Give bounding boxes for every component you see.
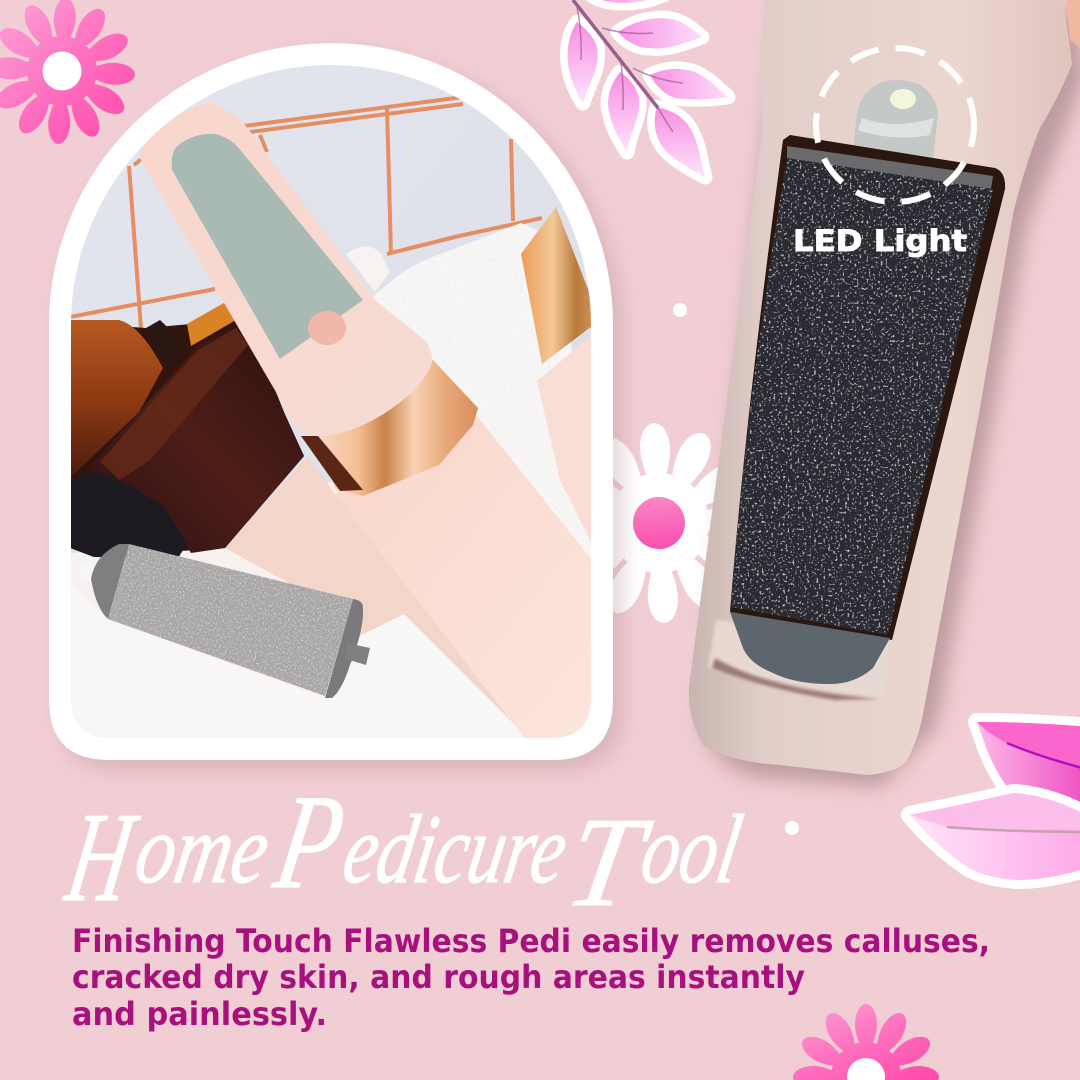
roller end cap (730, 612, 890, 684)
translucent window base (708, 620, 892, 700)
panel: arched product photo (49, 43, 613, 760)
title: edicure (336, 796, 575, 904)
white knob (346, 246, 390, 292)
dark underlay of bottles (60, 320, 304, 557)
device window frame (730, 135, 1005, 640)
upper white towel (374, 223, 591, 558)
gold collar (318, 359, 478, 496)
icon: pink daisy top-left (0, 0, 140, 148)
peach towel (225, 456, 525, 738)
description text: and painlessly. (72, 995, 327, 1033)
icon: lotus right (910, 722, 1080, 880)
description text: cracked dry skin, and rough areas instantly (72, 958, 805, 996)
dark abrasive roller (731, 158, 993, 635)
dashed circle (816, 48, 974, 202)
title: H (57, 786, 147, 928)
panel: handheld device close-up (689, 0, 1080, 775)
label: LED Light: LED Light (793, 224, 967, 258)
amber bottle behind (187, 300, 236, 346)
LED bulb (853, 80, 938, 160)
spare roller (77, 544, 370, 698)
base towel (71, 482, 340, 698)
icon: pink daisy bottom (793, 1004, 939, 1080)
title: ome (128, 796, 277, 904)
bottle cap (60, 472, 187, 558)
handheld shadow (702, 12, 1080, 787)
product body (335, 416, 600, 745)
title: ool (634, 796, 749, 904)
icon: white daisy (554, 418, 764, 628)
title: T (557, 791, 660, 933)
decorative dots (673, 303, 687, 317)
grey roller (172, 134, 363, 359)
photo frame shadow (59, 53, 623, 770)
icon: leaf branch top (568, 0, 728, 177)
wire basket (70, 97, 542, 328)
title: P (265, 768, 354, 917)
description text (72, 922, 990, 1033)
dark bottle (88, 324, 304, 553)
pink jar (537, 336, 591, 542)
gold cap behind (521, 207, 591, 364)
photo background wall (71, 65, 591, 554)
description text: Finishing Touch Flawless Pedi easily removes calluses, (72, 922, 990, 960)
product head (139, 102, 432, 436)
lower white towel (349, 614, 524, 738)
